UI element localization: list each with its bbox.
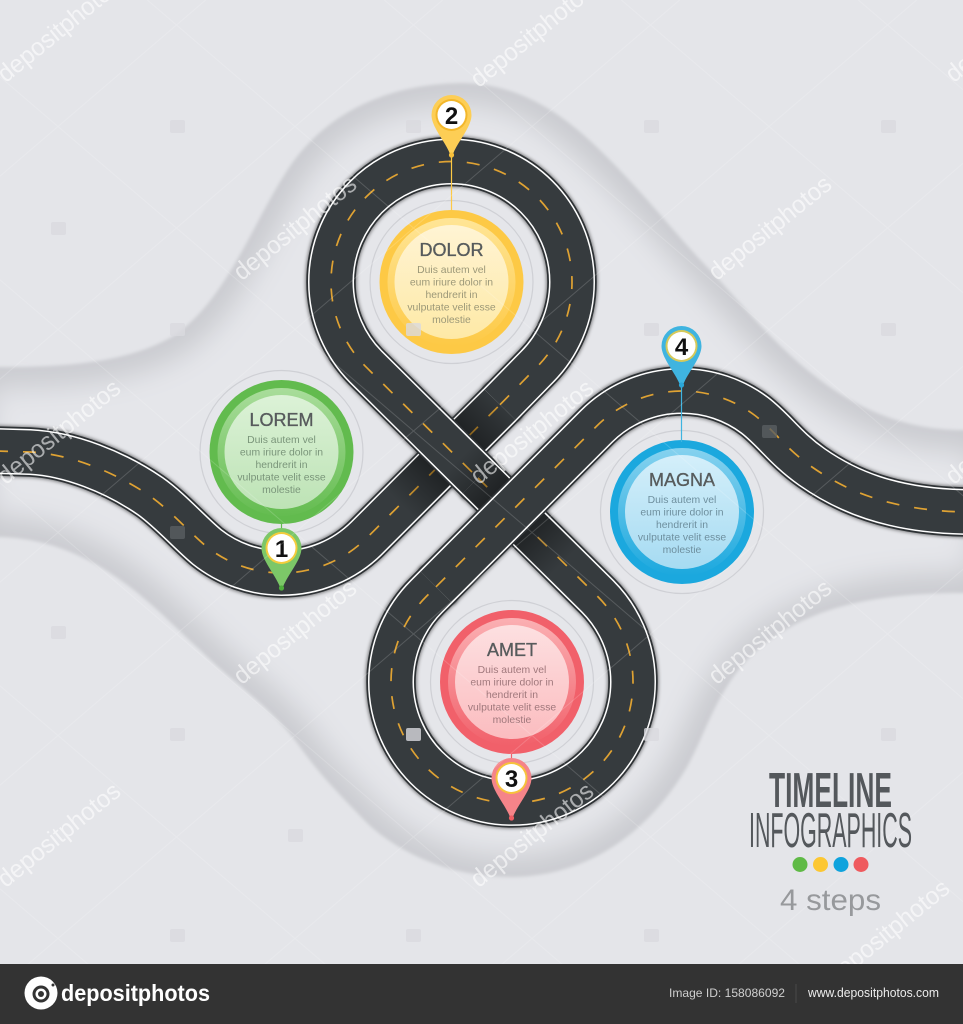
pin 1	[262, 522, 302, 591]
body text: molestie	[432, 315, 471, 326]
watermark text: depositphotos	[821, 874, 955, 990]
body text: Duis autem vel	[417, 265, 486, 276]
watermark text: depositphotos	[465, 374, 599, 490]
body text: eum iriure dolor in	[240, 448, 323, 458]
watermark text: depositphotos	[228, 170, 362, 286]
body text: eum iriure dolor in	[410, 278, 493, 288]
watermark text: depositphotos	[703, 574, 837, 690]
footer bar	[0, 964, 963, 1024]
pin 2: 2	[445, 103, 458, 130]
step 3 panel: Amet	[430, 600, 594, 764]
road segment: final diagonal, peak and exit	[436, 391, 963, 587]
road shadow	[0, 161, 963, 803]
body text: hendrerit in	[486, 690, 538, 701]
road backdrop band with soft shadow	[0, 82, 963, 878]
body text	[638, 495, 726, 556]
subtitle: 4 steps	[780, 884, 881, 917]
heading: MAGNA	[649, 470, 715, 490]
watermark text: depositphotos	[228, 574, 362, 690]
body text: vulputate velit esse	[638, 532, 726, 544]
body text	[468, 665, 556, 726]
body text: hendrerit in	[256, 460, 308, 471]
heading: LOREM	[249, 410, 314, 430]
step 4 panel: Magna	[600, 430, 764, 594]
body text: Duis autem vel	[247, 435, 316, 446]
body text: molestie	[493, 715, 532, 726]
watermark camera icons	[51, 120, 896, 942]
logo wordmark: depositphotos	[61, 980, 210, 1006]
step 1 panel: Lorem	[200, 370, 363, 534]
body text: vulputate velit esse	[468, 702, 556, 714]
pin 3	[492, 752, 532, 821]
underpass shadow 1	[400, 400, 504, 504]
pin 4: 4	[675, 334, 689, 361]
pin 3: 3	[505, 766, 518, 793]
body text: hendrerit in	[656, 520, 708, 531]
body text	[407, 265, 496, 326]
title block	[749, 764, 912, 917]
body text: eum iriure dolor in	[470, 678, 554, 688]
road segment: bottom loop	[391, 478, 633, 803]
icon: camera logo	[24, 976, 58, 1010]
pin 4	[662, 326, 702, 442]
colour dots	[792, 857, 868, 872]
underpass shadow 2	[459, 459, 563, 563]
website: www.depositphotos.com	[807, 986, 939, 1000]
body text: vulputate velit esse	[237, 472, 326, 484]
body text	[237, 435, 326, 496]
heading: AMET	[487, 640, 537, 660]
image id: Image ID: 158086092	[669, 986, 785, 1000]
step 2 panel: Dolor	[370, 200, 533, 364]
body text: Duis autem vel	[478, 665, 546, 676]
road segment: top loop	[331, 161, 572, 482]
body text: Duis autem vel	[648, 495, 716, 506]
body text: eum iriure dolor in	[640, 508, 724, 518]
heading: DOLOR	[419, 240, 484, 260]
pin 1: 1	[275, 536, 288, 563]
pin 2	[432, 95, 472, 211]
watermark text: depositphotos	[703, 170, 837, 286]
body text: hendrerit in	[426, 290, 478, 301]
body text: molestie	[663, 545, 702, 556]
body text: molestie	[262, 485, 301, 496]
road segment: entry, valley and rising diagonal	[0, 400, 505, 573]
watermark text: depositphotos	[465, 777, 599, 893]
body text: vulputate velit esse	[407, 302, 496, 314]
road	[0, 161, 963, 803]
